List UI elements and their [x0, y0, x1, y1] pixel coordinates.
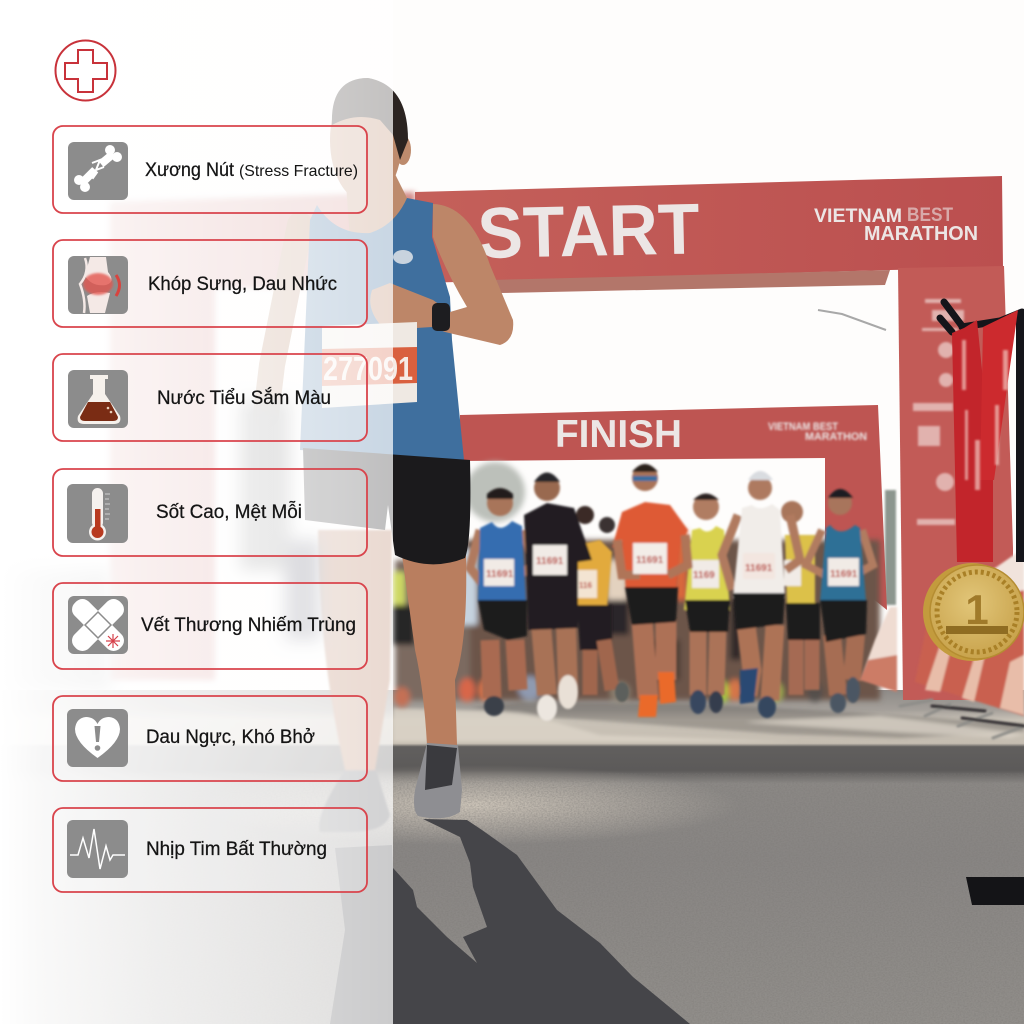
runner: yellow vest left: [576, 506, 629, 702]
barrier fence: [860, 548, 1024, 716]
lamp post: [818, 310, 886, 330]
blue tank top: [300, 198, 464, 460]
distant trees at arch gap: [885, 490, 896, 605]
tree behind finish arch: [465, 462, 525, 522]
vietnam best marathon logo: VIETNAM: [814, 206, 902, 227]
front shoe: [414, 743, 462, 818]
runner: blue vest left: [470, 488, 534, 716]
race bib: [322, 322, 417, 408]
runner: blue vest right: [806, 489, 873, 713]
medal stand: [940, 302, 1024, 562]
runner: black shirt: [524, 472, 592, 721]
shirt logo: [393, 250, 413, 264]
sky background: [0, 0, 1024, 720]
card: swollen joint: [53, 240, 367, 327]
barrier metal feet: [900, 700, 1024, 738]
label: high fever: Sốt Cao, Mệt Mỗi: [156, 501, 302, 523]
runner: red shirt: [612, 464, 688, 717]
icon: bandage: [68, 595, 128, 655]
finish arch logo: [768, 421, 867, 443]
card: stress fracture: (Stress Fracture): [239, 163, 358, 180]
card: dark urine: [53, 354, 367, 441]
sunlit road glow: [200, 765, 740, 845]
card: high fever: [53, 469, 367, 556]
left panel faded background detail: [0, 400, 320, 690]
label: swollen joint: Khóp Sưng, Dau Nhức: [148, 274, 337, 295]
finish arch logo: MARATHON: [805, 431, 867, 443]
finish label: FINISH: [555, 413, 682, 456]
neck and head: [330, 78, 411, 240]
runner: blue vest left: 11691: [486, 569, 514, 580]
black shorts: [303, 448, 470, 564]
icon: broken bone: [68, 142, 128, 200]
front arm: [370, 204, 513, 345]
start arch: [110, 176, 1003, 680]
runner: yellow vest centre: [684, 494, 730, 714]
runner: yellow vest left: 116: [579, 581, 592, 590]
label: infected wound: Vết Thương Nhiếm Trùng: [141, 615, 356, 636]
back arm: [266, 225, 300, 415]
medal ribbon: [952, 310, 1018, 562]
finish arch: [460, 405, 887, 610]
label: chest pain: Dau Ngực, Khó Bhở: [146, 727, 315, 748]
icon: knee joint: [68, 256, 128, 314]
wristwatch: [432, 303, 450, 331]
card: abnormal heartbeat: [53, 808, 367, 892]
road base plate of stand: [966, 877, 1024, 905]
label: stress fracture: Xương Nút: [145, 160, 235, 181]
runner: white vest: 11691: [745, 563, 773, 574]
vietnam best marathon logo: MARATHON: [864, 223, 978, 245]
runner: black shirt: 11691: [536, 556, 564, 567]
start arch right pillar: [898, 266, 1013, 700]
race bib: 277091: [323, 350, 413, 387]
front leg: [402, 555, 466, 745]
runners in the background: [470, 464, 873, 721]
card: chest pain: [53, 696, 367, 781]
crowd behind the runners: [393, 530, 880, 707]
icon: thermometer: [67, 484, 128, 543]
road grain texture: [0, 773, 1024, 1024]
finish arch logo: VIETNAM BEST: [768, 421, 838, 433]
label: dark urine: Nước Tiểu Sắm Màu: [157, 387, 331, 409]
back leg and shoe: [318, 530, 392, 832]
road surface: [0, 690, 1024, 1024]
icon: heart warning: [67, 709, 128, 767]
vietnam best marathon logo: BEST: [907, 205, 953, 226]
road light and shadow streaks: [393, 702, 1024, 742]
runner: red shirt: 11691: [636, 555, 664, 566]
translucent white panel: [0, 0, 393, 1024]
card: stress fracture: [53, 126, 367, 213]
main runner shadow: [330, 819, 690, 1024]
main runner in front: [266, 78, 513, 832]
vietnam best marathon logo: [814, 205, 978, 245]
icon: flask: [68, 370, 128, 428]
gold medal: [923, 563, 1024, 661]
runner: white vest: [722, 471, 800, 718]
medical cross badge: [56, 40, 116, 100]
runner: blue vest right: 11691: [830, 569, 858, 580]
medal number: 1: [965, 586, 989, 633]
runner: yellow vest centre: 1169: [693, 570, 715, 581]
card: infected wound: [53, 583, 367, 669]
icon: ecg pulse: [67, 820, 128, 878]
runner: yellow vest right: [781, 501, 820, 695]
start label: START: [477, 189, 700, 274]
label: abnormal heartbeat: Nhịp Tim Bất Thường: [146, 839, 327, 860]
